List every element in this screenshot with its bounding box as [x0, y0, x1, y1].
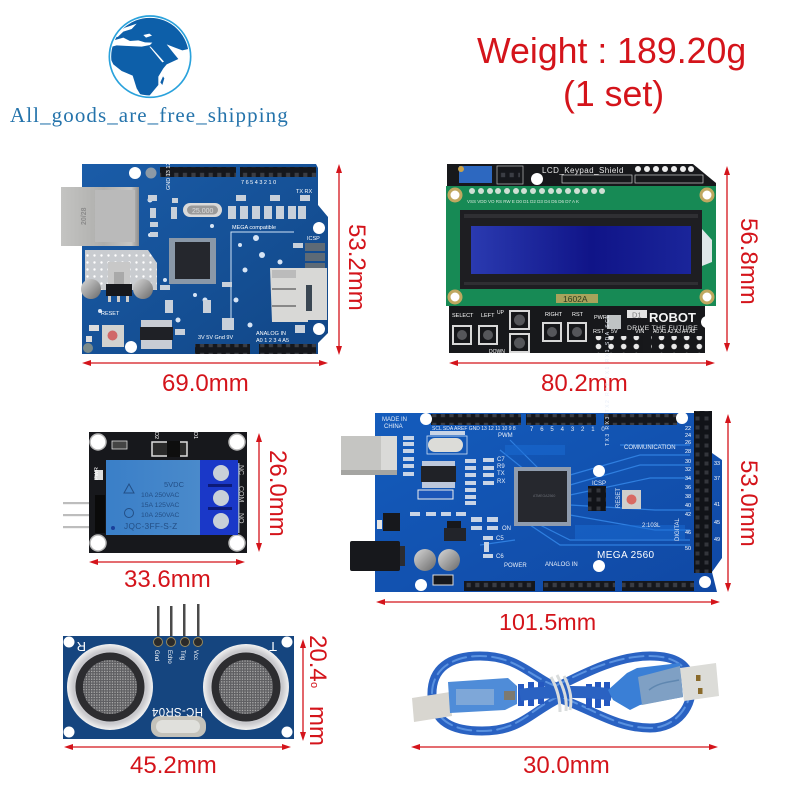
right edge numbers: 40: [685, 503, 691, 509]
right edge numbers: 33: [714, 461, 720, 467]
silk labels: [101, 138, 320, 344]
sensor labels: Gnd: [153, 650, 159, 661]
main chip: [169, 238, 216, 284]
sensor labels: Echo: [166, 650, 172, 664]
relay holes: [90, 434, 245, 551]
arrow: 33.6mm width: [89, 559, 245, 565]
arrow: 30.0mm width: [411, 744, 718, 750]
keypad labels: UP: [497, 310, 505, 316]
right edge numbers: 42: [685, 512, 691, 518]
right edge numbers: 50: [685, 546, 691, 552]
mega silk text: MADE IN: [382, 417, 407, 423]
keypad labels: 5V: [611, 329, 618, 335]
relay top components: PWR: [94, 467, 100, 480]
dimension: 53.2mm: 53.2mm: [343, 224, 370, 311]
relay print: 15A 125VAC: [141, 502, 180, 509]
lcd blue screen: [471, 226, 691, 274]
top pin area: [497, 166, 703, 185]
arrow: 45.2mm width: [64, 744, 291, 750]
arrow: 20.4mm height: [300, 639, 306, 741]
potentiometer: [458, 166, 492, 183]
pin headers: [160, 167, 316, 354]
cable bundle center: [520, 692, 612, 695]
mega silk text: 7 6 5 4 3 2 1 0: [530, 427, 607, 433]
panel: lcd keypad shield: VSS VDD VO RS RW E D0 D1 D2 D3 D4 D5 D6 D7 A K: [467, 199, 579, 204]
mega silk text: CHINA: [384, 424, 403, 430]
relay print: [111, 480, 185, 531]
dimension: 101.5mm: 101.5mm: [499, 609, 596, 635]
dimension: 45.2mm: 45.2mm: [130, 752, 217, 779]
silk labels: A0 1 2 3 4 A5: [256, 338, 289, 344]
arrow: 69.0mm width: [82, 360, 328, 366]
trace panel outline: [231, 232, 294, 325]
mega silk text: ICSP: [592, 481, 606, 487]
protruding pins: [63, 502, 93, 528]
dimension: 80.2mm: 80.2mm: [541, 370, 628, 397]
mega silk text: SCL SDA AREF GND 13 12 11 10 9 8: [432, 426, 516, 432]
silk labels: 7 6 5 4 3 2 1 0: [241, 180, 276, 186]
left transducer: [67, 644, 153, 730]
dimension: 30.0mm: 30.0mm: [523, 752, 610, 779]
pcb board: [82, 164, 328, 354]
sd card slot: [270, 268, 327, 322]
sensor crystal: [151, 716, 206, 737]
right edge numbers: 38: [685, 494, 691, 500]
right edge numbers: 41: [714, 502, 720, 508]
mega smd parts: [403, 431, 498, 558]
arrow: 53.2mm height: [336, 164, 342, 355]
dimension: 69.0mm: 69.0mm: [162, 370, 249, 397]
panel: ultrasonic sensor: [63, 604, 294, 739]
mega traces: [480, 440, 690, 545]
rj45 jack: 20/28: [81, 207, 88, 225]
dimension: 20.4 mm: o: [308, 682, 320, 688]
mega crystal: [427, 436, 467, 454]
right edge numbers: 34: [685, 476, 691, 482]
screw terminal: [200, 460, 240, 535]
logo: globe: [108, 15, 192, 98]
crystal: [183, 203, 222, 217]
usb b socket: [341, 436, 397, 475]
relay top components: D1: [192, 432, 198, 439]
reset button: [86, 325, 124, 347]
right edge numbers: 30: [685, 459, 691, 465]
arrow: 56.8mm height: [724, 166, 730, 352]
keypad labels: VIN: [635, 329, 644, 335]
heat sink and regulator: [85, 250, 157, 302]
dimension: 53.0mm: 53.0mm: [735, 460, 762, 547]
bottom pads: [592, 315, 704, 353]
dimension: 26.0mm: 26.0mm: [264, 450, 291, 537]
silk labels: GND 13 12 11 10 9 8: [166, 138, 172, 190]
capacitors: [81, 279, 153, 299]
black top strip: [447, 164, 716, 190]
silk labels: 3V 5V Gnd 9V: [198, 335, 233, 341]
right edge numbers: 37: [714, 476, 720, 482]
keypad labels: RST: [593, 329, 605, 335]
right edge numbers: [685, 426, 720, 552]
icsp header: [305, 243, 325, 270]
display pads: [469, 188, 605, 194]
sensor labels: Vcc: [192, 650, 198, 660]
soic chip: [140, 320, 173, 349]
mega silk text: DIGITAL: [675, 517, 681, 541]
keypad labels: LEFT: [481, 313, 495, 319]
cable loops: [432, 656, 691, 731]
mega silk text: RX: [497, 479, 505, 485]
black keypad strip: [449, 304, 705, 353]
keypad labels: A0 A1 A2 A3 A4 A5: [653, 329, 695, 335]
lcd bezel: [460, 210, 702, 289]
mega silk text: ON: [502, 526, 511, 532]
right edge numbers: 46: [685, 530, 691, 536]
mega silk text: RESET: [616, 488, 622, 508]
model label: 1602A: [563, 294, 588, 304]
small regulator: [377, 513, 466, 541]
arrow: 80.2mm width: [449, 360, 715, 366]
mcu chip: [514, 467, 571, 526]
mega silk text: ANALOG IN: [545, 562, 578, 568]
panel: ethernet shield: [61, 138, 328, 354]
mega soic: [421, 461, 456, 488]
mega silk text: COMMUNICATION: [624, 445, 676, 451]
right edge numbers: 32: [685, 467, 691, 473]
dimension: 20.4 mm: [304, 635, 331, 746]
dfrobot logo: D1: [632, 310, 642, 320]
dimension: 20.4 mm: 20.4: [304, 635, 331, 682]
b plug housing: [448, 678, 517, 713]
panel: usb cable: [412, 656, 719, 731]
mega pcb: [375, 413, 722, 592]
silk labels: ICSP: [307, 236, 320, 242]
mega silk text: MEGA 2560: [597, 550, 655, 561]
panel: lcd keypad shield: [446, 164, 716, 355]
right edge numbers: 49: [714, 537, 720, 543]
sensor pcb: [63, 636, 294, 739]
sensor labels: T: [269, 639, 277, 654]
keypad labels: [452, 310, 695, 355]
weight heading: Weight : 189.20g: [477, 31, 746, 71]
sensor labels: Trig: [179, 650, 185, 660]
right edge numbers: 26: [685, 440, 691, 446]
sensor labels: R: [77, 639, 86, 654]
relay print: JQC-3FF-S-Z: [124, 521, 178, 531]
relay board: [89, 432, 247, 553]
icsp and reset: [588, 486, 641, 511]
silk labels: ANALOG IN: [256, 331, 286, 337]
arrow: 53.0mm height: [725, 414, 731, 592]
relay labels: COM: [237, 486, 244, 502]
white cable ties: [551, 675, 571, 712]
right edge numbers: 45: [714, 520, 720, 526]
mega silk text: PWM: [498, 433, 513, 439]
shield label: LCD_Keypad_Shield: [542, 166, 624, 175]
right transducer: [203, 644, 289, 730]
right edge numbers: 22: [685, 426, 691, 432]
keypad labels: DOWN: [489, 349, 505, 355]
mega headers: [431, 411, 712, 591]
mcu chip: ATMEGA2560: [533, 494, 555, 498]
backlight tab: [702, 229, 712, 266]
rj45 jack: [61, 187, 139, 246]
relay top components: D2: [153, 432, 159, 439]
pin pads: [154, 638, 202, 646]
sensor labels: HC-SR04: [151, 705, 203, 717]
right edge numbers: 24: [685, 433, 691, 439]
keypad labels: PWR: [594, 315, 607, 321]
arrow: 26.0mm height: [256, 433, 262, 552]
mounting holes: [449, 189, 713, 303]
dfrobot logo: DRIVE THE FUTURE: [627, 325, 698, 332]
relay print: 10A 250VAC: [141, 512, 180, 519]
b plug metal: [412, 692, 452, 722]
smd components: [148, 195, 310, 335]
dimension: 56.8mm: 56.8mm: [735, 218, 762, 305]
mega mounting holes: [415, 412, 711, 591]
dimension: 20.4 mm: mm: [304, 706, 331, 746]
logo caption: All_goods_are_free_shipping: [10, 103, 289, 127]
relay labels: NO: [237, 513, 244, 524]
keypad labels: RIGHT: [545, 312, 563, 318]
mega silk text: TX3 RX3 TX2 RX2 TX1 RX1 SDA SCL: [605, 314, 611, 446]
weight heading: (1 set): [563, 74, 664, 114]
mega silk text: C6: [496, 554, 504, 560]
sensor holes: [64, 636, 292, 738]
right edge numbers: 36: [685, 485, 691, 491]
arrow: 101.5mm width: [376, 599, 720, 605]
a plug metal: [680, 663, 719, 701]
mega silk text: TX: [497, 471, 505, 477]
mega silk text: C5: [496, 536, 504, 542]
relay print: 10A 250VAC: [141, 492, 180, 499]
sensor pins: [157, 604, 200, 638]
dfrobot logo: [627, 310, 698, 332]
mega silk text: [382, 314, 681, 569]
dc jack: [350, 541, 405, 571]
dfrobot logo: ROBOT: [649, 310, 696, 325]
silk labels: RESET: [101, 311, 120, 317]
model label: [556, 294, 598, 304]
weight heading: [477, 31, 746, 114]
relay blue body: [106, 460, 200, 535]
relay top components: [94, 432, 198, 480]
sensor labels: [77, 639, 277, 717]
mega silk text: C7: [497, 457, 505, 463]
green display pcb: [446, 186, 716, 306]
relay labels: NC: [237, 465, 244, 475]
keypad labels: RST: [572, 312, 584, 318]
a plug housing: [608, 663, 683, 710]
strain relief: [518, 682, 610, 708]
panel: mega 2560: [341, 314, 722, 592]
capacitors: [414, 549, 460, 571]
silk labels: MEGA compatible: [232, 225, 276, 231]
mega silk text: R9: [497, 464, 505, 470]
relay print: 5VDC: [164, 480, 185, 489]
silk labels: TX RX: [296, 189, 313, 195]
right edge numbers: 28: [685, 449, 691, 455]
dimension: 33.6mm: 33.6mm: [124, 566, 211, 593]
mega silk text: 2:103L: [642, 523, 661, 529]
crystal: 25.000: [192, 208, 214, 215]
mega silk text: POWER: [504, 563, 527, 569]
relay labels: [95, 465, 244, 533]
panel: relay module: [63, 432, 247, 553]
keypad buttons: [452, 310, 587, 353]
keypad labels: SELECT: [452, 313, 474, 319]
